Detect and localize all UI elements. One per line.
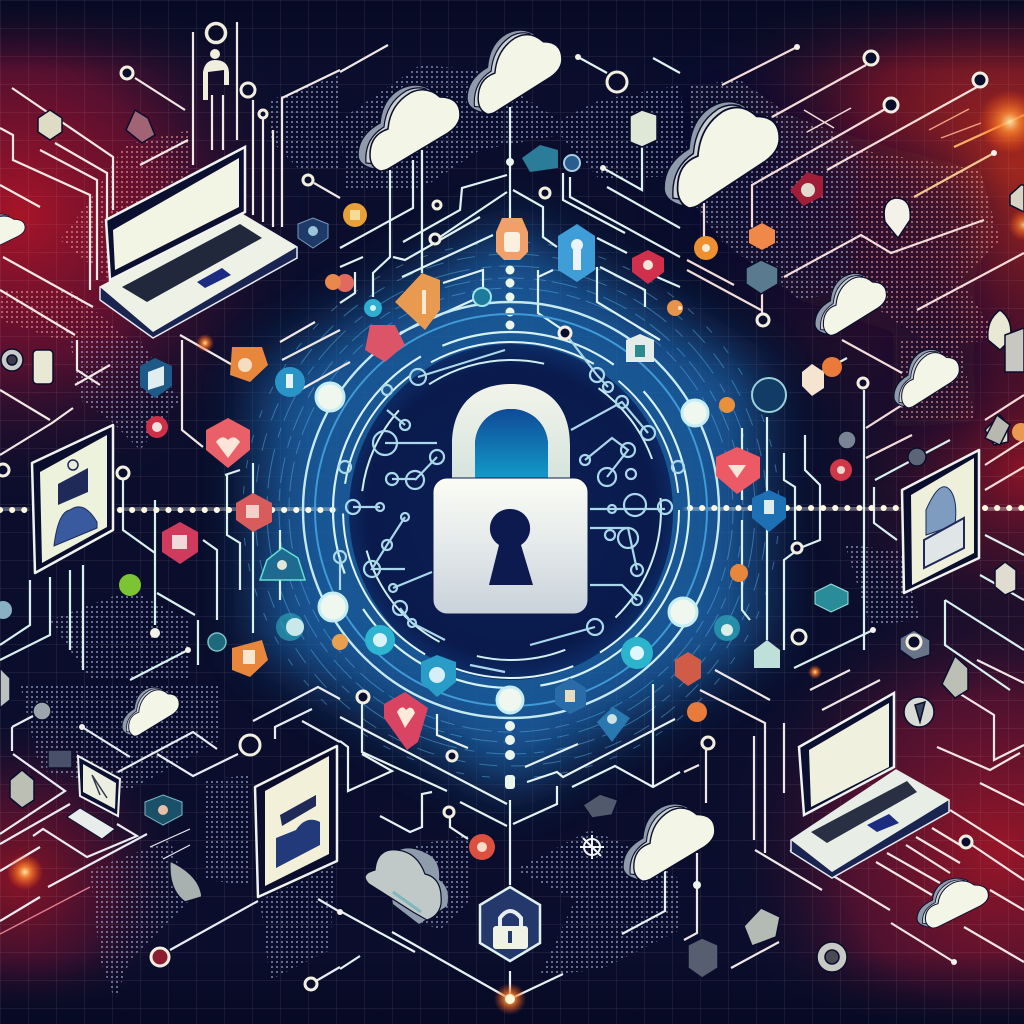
small laptop: bottom left xyxy=(67,756,120,839)
laptop: top left xyxy=(100,147,297,338)
shackle xyxy=(452,384,570,478)
tablet: left xyxy=(32,425,113,573)
keyhole xyxy=(489,509,533,585)
central rings xyxy=(303,302,719,718)
shackle opening xyxy=(475,409,548,478)
sparks xyxy=(7,90,1024,890)
circuit lines: upper right xyxy=(687,47,1024,490)
heart shield bottom xyxy=(384,692,428,750)
gear icon xyxy=(580,835,604,859)
circuit lines: upper left xyxy=(0,22,388,455)
circuit lines: middle right xyxy=(742,358,1024,690)
circuit lines: lower right xyxy=(684,660,1024,968)
circuit lines: middle left xyxy=(0,463,280,680)
person icon xyxy=(203,24,229,100)
circuit lines: top centre xyxy=(340,57,680,340)
centre blue glow xyxy=(260,225,760,790)
green icon xyxy=(119,574,141,596)
tablet: right xyxy=(902,450,979,593)
vertical data line nodes xyxy=(505,158,701,889)
laptop: bottom right xyxy=(791,693,949,878)
tablet: bottom xyxy=(255,746,337,897)
grey cloud xyxy=(365,848,448,924)
cyan and blue icons xyxy=(0,145,848,825)
heart shield right xyxy=(716,447,760,494)
blue streak arcs xyxy=(243,242,779,778)
bottom glow node xyxy=(494,983,526,1015)
hexagon padlock badge xyxy=(480,887,540,961)
heart shield left xyxy=(206,418,250,468)
circuit lines: lower left xyxy=(0,687,340,981)
padlock xyxy=(433,384,588,614)
horizontal glowing data line xyxy=(0,508,1024,510)
orange icons xyxy=(230,203,1024,722)
lock body xyxy=(433,478,588,614)
red shields and badges xyxy=(146,172,852,860)
inner circuit nodes xyxy=(334,327,684,672)
ring junction nodes xyxy=(316,383,708,713)
circuit lines: lower centre xyxy=(340,684,680,999)
